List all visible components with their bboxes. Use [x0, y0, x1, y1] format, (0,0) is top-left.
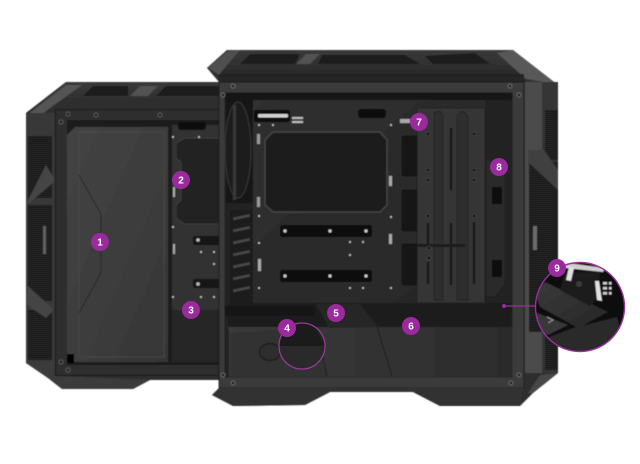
callout 4: zoom circle of cable cover	[279, 323, 325, 369]
badge 2: 2	[178, 176, 184, 186]
right case front frame	[219, 82, 524, 388]
right case frame screws	[221, 84, 521, 385]
PSU shroud	[225, 303, 512, 377]
callout 9: zoom circle of front panel detail	[535, 262, 625, 352]
right case bottom trim	[212, 388, 524, 406]
left case body	[26, 82, 225, 389]
left case frame	[56, 110, 226, 376]
badge 6	[402, 317, 420, 335]
badge 4: 4	[284, 324, 290, 334]
badge 5: 5	[333, 308, 339, 320]
badge 1: 1	[97, 238, 103, 248]
badge 4	[278, 319, 296, 337]
motherboard tray cutout	[265, 132, 387, 212]
right case side panel	[525, 82, 558, 393]
right case: open chassis	[207, 50, 558, 406]
badge 8	[490, 158, 508, 176]
badge 9: 9	[554, 264, 560, 274]
front fans behind tray	[401, 135, 419, 286]
left case motherboard tray	[172, 122, 225, 362]
tray top connectors and holes	[254, 109, 410, 289]
badge 3: 3	[188, 306, 194, 316]
badge 2	[172, 171, 190, 189]
badge 9	[548, 259, 566, 277]
right case outer body	[207, 50, 558, 406]
badge 8: 8	[496, 162, 502, 174]
badge 7: 7	[416, 118, 422, 128]
badge 7	[410, 113, 428, 131]
left case side panel	[26, 113, 150, 389]
badge 6: 6	[408, 322, 414, 332]
drive bracket	[417, 108, 485, 312]
rear expansion slots	[230, 210, 253, 303]
badge 3	[182, 301, 200, 319]
left case: rear view of the chassis	[26, 82, 226, 389]
left case large side cover	[67, 127, 168, 363]
right case top vents	[207, 50, 556, 84]
tray slots	[280, 225, 372, 282]
left case interior	[67, 120, 225, 365]
leader line to callout 9	[502, 304, 536, 308]
right case interior	[225, 93, 512, 377]
badge 5	[327, 304, 345, 322]
left case frame screws	[59, 112, 162, 372]
badge 1	[91, 233, 109, 251]
left case top vents	[26, 82, 225, 122]
cable chamber cut-outs	[486, 160, 505, 297]
rear exhaust fan	[225, 95, 253, 203]
